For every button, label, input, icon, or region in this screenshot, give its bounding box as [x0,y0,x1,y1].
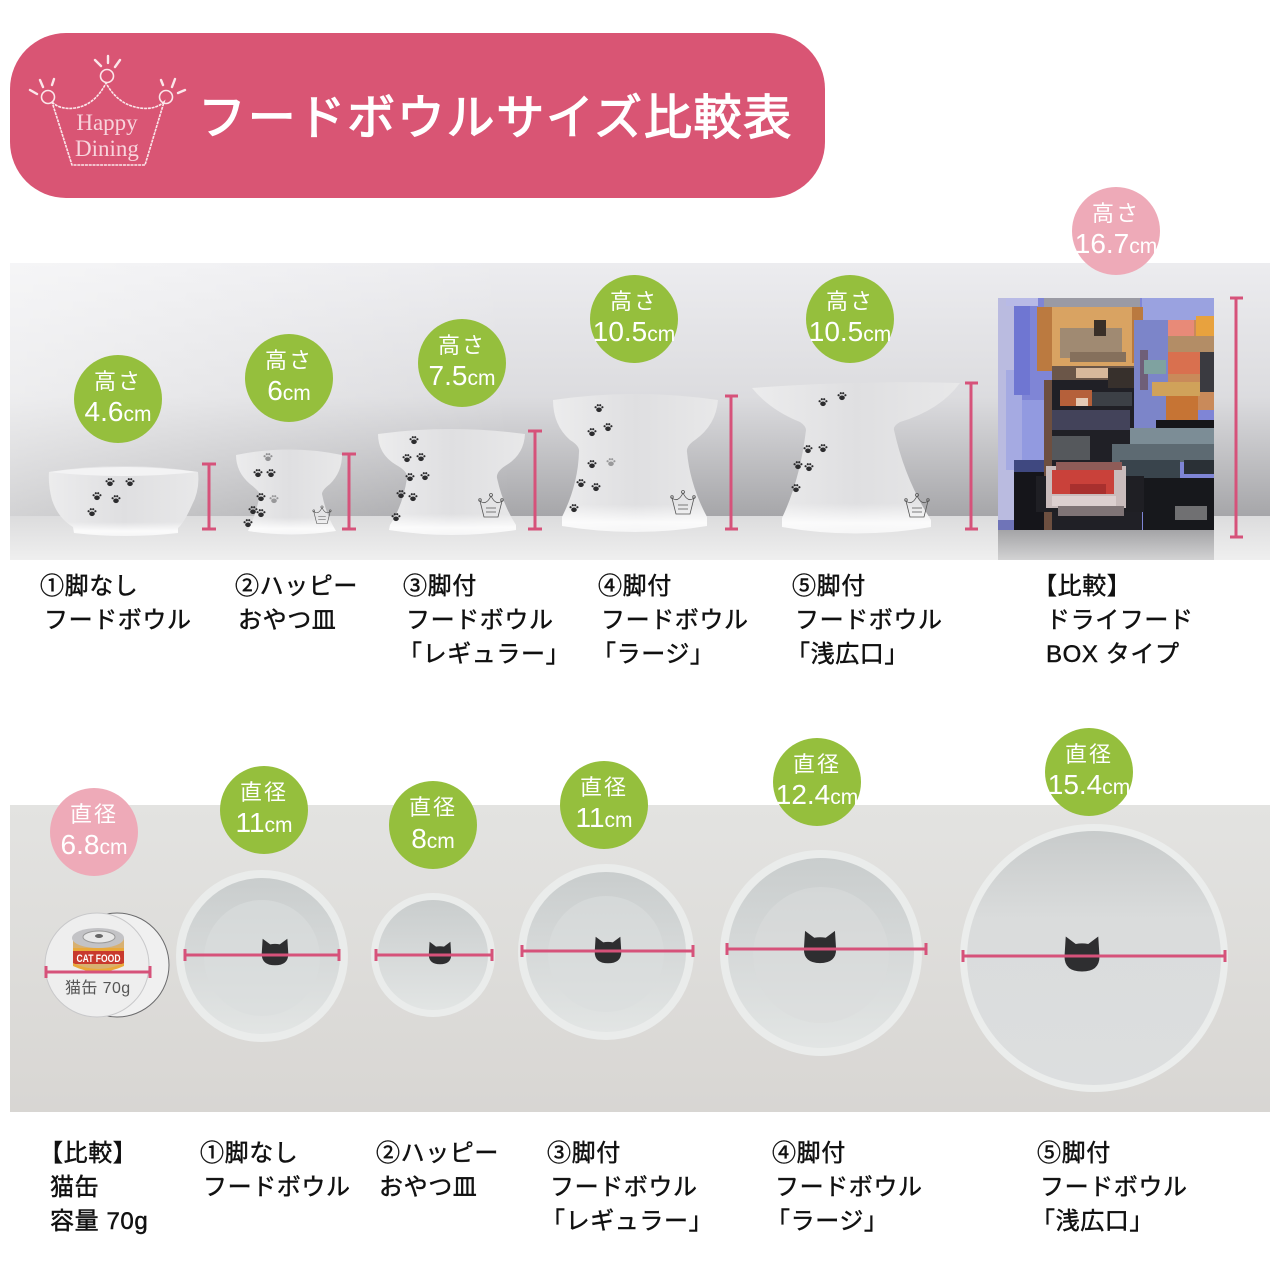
icon: Happy Dining crown logo: Dining [75,136,139,161]
icon: Happy Dining crown logo: Happy [76,110,138,135]
badge: diameter 11cm (2): 直径 [580,775,628,800]
badge: height 6cm: 6cm [267,375,311,406]
label: comparison cat can [39,1140,148,1235]
badge: diameter 11cm (2): 11cm [575,802,633,833]
label: regular bowl (diameter row) [541,1140,713,1235]
badge: height 16.7cm: 16.7cm [1075,228,1157,259]
label: wide bowl (height row): ⑤脚付 [792,573,866,600]
bowl top view 2 [371,893,495,1017]
label: wide bowl (diameter row): フードボウル [1040,1174,1188,1201]
badge: diameter 11cm (1): 直径 [240,780,288,805]
badge: diameter 12.4cm [773,738,861,826]
photo backdrop [10,263,1270,560]
badge: height 6cm: 高さ [265,348,313,373]
badge: height 7.5cm: 7.5cm [429,360,495,391]
label: large bowl (height row): 「ラージ」 [592,641,715,668]
label: no-leg bowl (height row) [40,573,192,634]
label: comparison dry food: 【比較】 [1033,573,1131,600]
badge: height 4.6cm [74,355,162,443]
badge: diameter 8cm: 8cm [411,823,455,854]
label: no-leg bowl (diameter row): ①脚なし [200,1140,298,1167]
badge: height 10.5cm large: 高さ [610,289,658,314]
panel: title banner [10,33,825,198]
badge: height 10.5cm wide: 高さ [826,289,874,314]
label: happy dish (height row): おやつ皿 [238,607,336,634]
label: comparison dry food [1033,573,1194,668]
badge: height 7.5cm: 高さ [438,333,486,358]
label: large bowl (diameter row) [766,1140,923,1235]
badge: diameter 11cm (2) [560,761,648,849]
diameter bar 1 [185,949,339,961]
label: wide bowl (diameter row) [1031,1140,1188,1235]
diameter bar 3 [522,945,693,957]
label: regular bowl (diameter row): フードボウル [550,1174,698,1201]
label: comparison cat can: 【比較】 [39,1140,137,1167]
badge: height 7.5cm [418,319,506,407]
badge: diameter 15.4cm [1045,728,1133,816]
badge: diameter 11cm (1): 11cm [235,807,293,838]
photo backdrop [10,805,1270,1112]
badge: height 16.7cm [1072,187,1160,275]
label: large bowl (diameter row): 「ラージ」 [766,1208,889,1235]
height bar 3 [528,431,542,529]
label: no-leg bowl (diameter row) [200,1140,351,1201]
cat can card [45,913,169,1017]
label: happy dish (diameter row): ②ハッピー [376,1140,499,1167]
badge: diameter 6.8cm: 6.8cm [61,829,127,860]
badge: diameter 15.4cm: 直径 [1065,742,1113,767]
can name: 猫缶 70g [65,979,131,997]
badge: diameter 8cm [389,781,477,869]
bowl top view 3 [518,864,694,1040]
height bar: food box [1230,298,1243,537]
label: happy dish (height row) [235,573,358,634]
label: regular bowl (height row): フードボウル [406,607,554,634]
diameter bar 5 [963,950,1225,962]
height bar 5 [965,383,978,529]
badge: height 16.7cm: 高さ [1092,201,1140,226]
label: no-leg bowl (diameter row): フードボウル [203,1174,351,1201]
label: comparison dry food: ドライフード [1046,607,1194,634]
label: large bowl (height row): フードボウル [601,607,749,634]
label: happy dish (height row): ②ハッピー [235,573,358,600]
badge: height 4.6cm: 4.6cm [85,396,151,427]
label: regular bowl (diameter row): 「レギュラー」 [541,1208,713,1235]
bowl top view 4 [720,850,926,1056]
diameter bar 4 [727,943,926,955]
label: comparison cat can: 猫缶 [50,1174,99,1201]
badge: diameter 11cm (1) [220,766,308,854]
badge: diameter 12.4cm: 12.4cm [776,779,858,810]
label: large bowl (height row): ④脚付 [598,573,672,600]
label: wide bowl (height row): 「浅広口」 [786,641,909,668]
bowl 5: wide shallow legged bowl [752,382,978,534]
badge: diameter 12.4cm: 直径 [793,752,841,777]
label: happy dish (diameter row) [376,1140,499,1201]
label: large bowl (height row) [592,573,749,668]
label: wide bowl (diameter row): ⑤脚付 [1037,1140,1111,1167]
label: happy dish (diameter row): おやつ皿 [379,1174,477,1201]
label: regular bowl (height row): ③脚付 [403,573,477,600]
badge: diameter 15.4cm: 15.4cm [1048,769,1130,800]
panel: diameter comparison photo [10,805,1270,1112]
diameter bar 2 [376,949,492,961]
bowl 2: happy snack dish [236,450,356,534]
bowl top view 1 [176,870,348,1042]
panel: height comparison photo [10,263,1270,560]
label: comparison dry food: BOX タイプ [1046,641,1180,668]
label: regular bowl (height row) [398,573,570,668]
label: wide bowl (height row) [786,573,943,668]
dry food box mosaic [998,298,1214,560]
height bar 1 [202,464,216,529]
label: regular bowl (diameter row): ③脚付 [547,1140,621,1167]
bowl 1: no-leg food bowl [49,464,216,536]
label: wide bowl (height row): フードボウル [795,607,943,634]
badge: diameter 6.8cm: 直径 [70,802,118,827]
badge: height 10.5cm large: 10.5cm [593,316,675,347]
title: フードボウルサイズ比較表 [198,92,793,145]
label: large bowl (diameter row): フードボウル [775,1174,923,1201]
label: regular bowl (height row): 「レギュラー」 [398,641,570,668]
badge: diameter 6.8cm [50,788,138,876]
icon: Happy Dining crown logo [30,56,185,165]
bowl 3: regular legged bowl [378,429,542,535]
badge: height 6cm [245,334,333,422]
height bar 4 [725,396,738,529]
icon: cat food can: CAT FOOD [76,953,121,965]
label: no-leg bowl (height row): フードボウル [44,607,192,634]
banner background [10,33,825,198]
diameter bar: can [46,966,150,978]
badge: height 10.5cm wide [806,275,894,363]
bowl 4: large legged bowl [553,394,738,532]
badge: diameter 8cm: 直径 [409,795,457,820]
height bar 2 [342,454,356,529]
bowl top view 5 [960,824,1228,1092]
label: wide bowl (diameter row): 「浅広口」 [1031,1208,1154,1235]
label: comparison cat can: 容量 70g [50,1208,148,1235]
label: large bowl (diameter row): ④脚付 [772,1140,846,1167]
label: no-leg bowl (height row): ①脚なし [40,573,138,600]
badge: height 10.5cm wide: 10.5cm [809,316,891,347]
badge: height 10.5cm large [590,275,678,363]
badge: height 4.6cm: 高さ [94,369,142,394]
